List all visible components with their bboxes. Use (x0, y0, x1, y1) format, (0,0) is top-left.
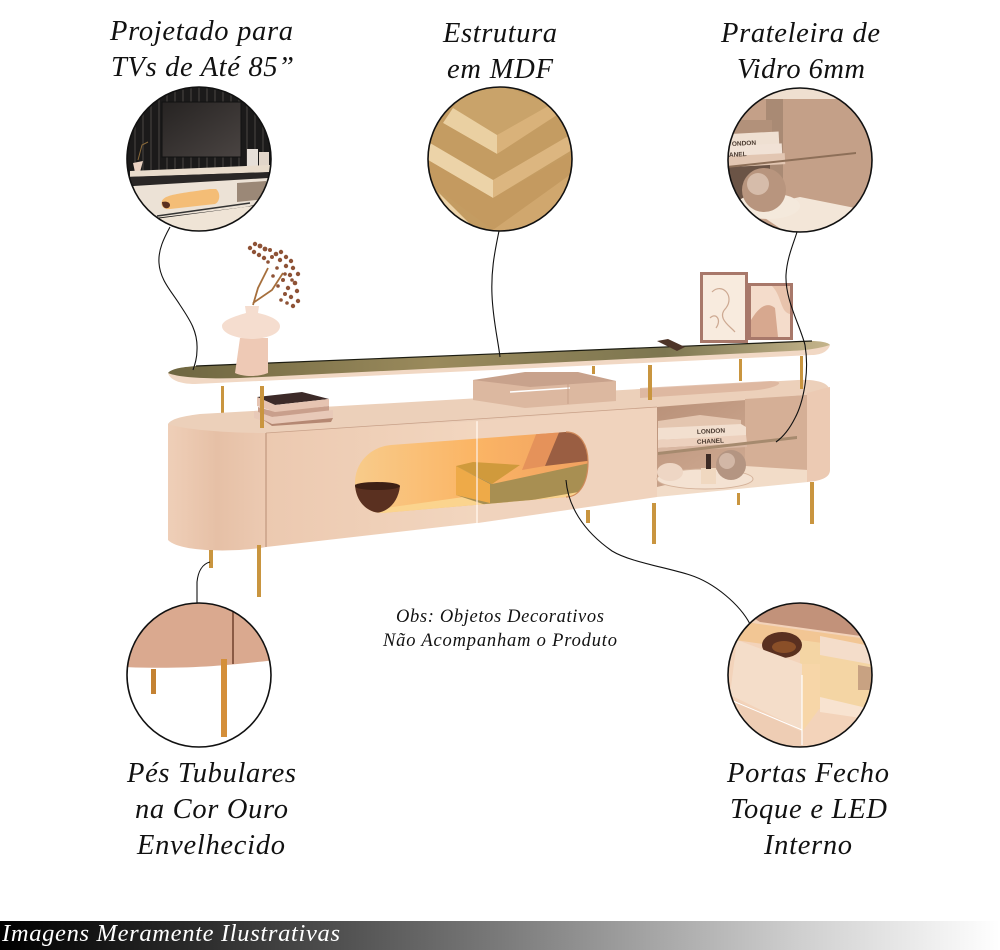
open compartment (657, 395, 808, 490)
callout line: feet (197, 562, 210, 604)
heading: Pés Tubulares (126, 758, 296, 861)
heading: Projetado para TVs: Projetado para (109, 16, 293, 47)
heading: Pés Tubulares: Pés Tubulares (126, 758, 296, 789)
top shelf underside (168, 345, 830, 384)
detail circle: doors and LED (725, 600, 875, 750)
compartment floor (657, 466, 808, 497)
vase (222, 306, 280, 376)
opening rim (566, 432, 588, 497)
heading: Projetado para TVs: TVs de Até 85” (111, 52, 294, 83)
footer bar: Imagens Meramente Ilustrativas (1, 920, 340, 947)
cabinet right side (807, 387, 830, 482)
heading: Estrutura em MDF: em MDF (447, 54, 554, 85)
callout line: doors (566, 480, 750, 624)
footer bar (0, 920, 1000, 950)
picture frames (700, 272, 793, 343)
callout line: TV (159, 227, 197, 370)
heading: Prateleira de Vidro: Vidro 6mm (737, 54, 865, 85)
front legs (209, 356, 814, 597)
opening with LED light (355, 432, 588, 513)
heading: Estrutura em MDF: Estrutura (442, 18, 557, 49)
heading: Portas Fecho Toque: Toque e LED (730, 794, 887, 825)
compartment partition (745, 395, 808, 478)
right door (478, 407, 657, 523)
bowl (354, 483, 400, 513)
open shelf books (658, 415, 747, 452)
callout line: glass shelf (776, 232, 807, 442)
heading: Pés Tubulares: na Cor Ouro (135, 794, 288, 825)
heading: Portas Fecho Toque: Portas Fecho (726, 758, 889, 789)
upper legs (221, 359, 742, 414)
detail circle: TV wall (125, 85, 275, 235)
detail circle: MDF boards (425, 85, 575, 235)
note: decorative objects: Obs: Objetos Decorativos (396, 607, 604, 627)
note: decorative objects (382, 607, 617, 651)
open shelf books: CHANEL (697, 438, 724, 446)
product: TV console (168, 242, 830, 597)
detail circle: glass shelf: ANEL (729, 151, 747, 159)
door seams (476, 421, 478, 523)
cabinet left side (168, 424, 266, 550)
cabinet top surface (168, 380, 830, 440)
detail circle: golden feet (125, 600, 275, 747)
console box (473, 372, 616, 408)
heading: Pés Tubulares: Envelhecido (136, 830, 285, 861)
detail circle: glass shelf: ONDON (732, 140, 757, 148)
open shelf books: LONDON (697, 428, 726, 436)
detail circle: glass shelf (725, 85, 875, 235)
stacked books (254, 392, 333, 426)
heading: Prateleira de Vidro: Prateleira de (720, 18, 880, 49)
heading: Prateleira de Vidro (720, 18, 880, 85)
note: decorative objects: Não Acompanham o Produto (382, 631, 617, 651)
heading: Projetado para TVs (109, 16, 294, 83)
gold box (456, 463, 590, 507)
left door (266, 421, 476, 547)
heading: Portas Fecho Toque (726, 758, 889, 861)
remote (657, 339, 685, 351)
tray with objects (657, 450, 753, 489)
glass shelf (658, 436, 797, 455)
callout line: MDF (492, 231, 500, 357)
shadow on top surface (640, 381, 779, 398)
heading: Estrutura em MDF (442, 18, 557, 85)
heading: Portas Fecho Toque: Interno (763, 830, 852, 861)
dried branch (248, 242, 300, 308)
books in opening (522, 430, 560, 470)
top shelf glass (168, 341, 830, 378)
